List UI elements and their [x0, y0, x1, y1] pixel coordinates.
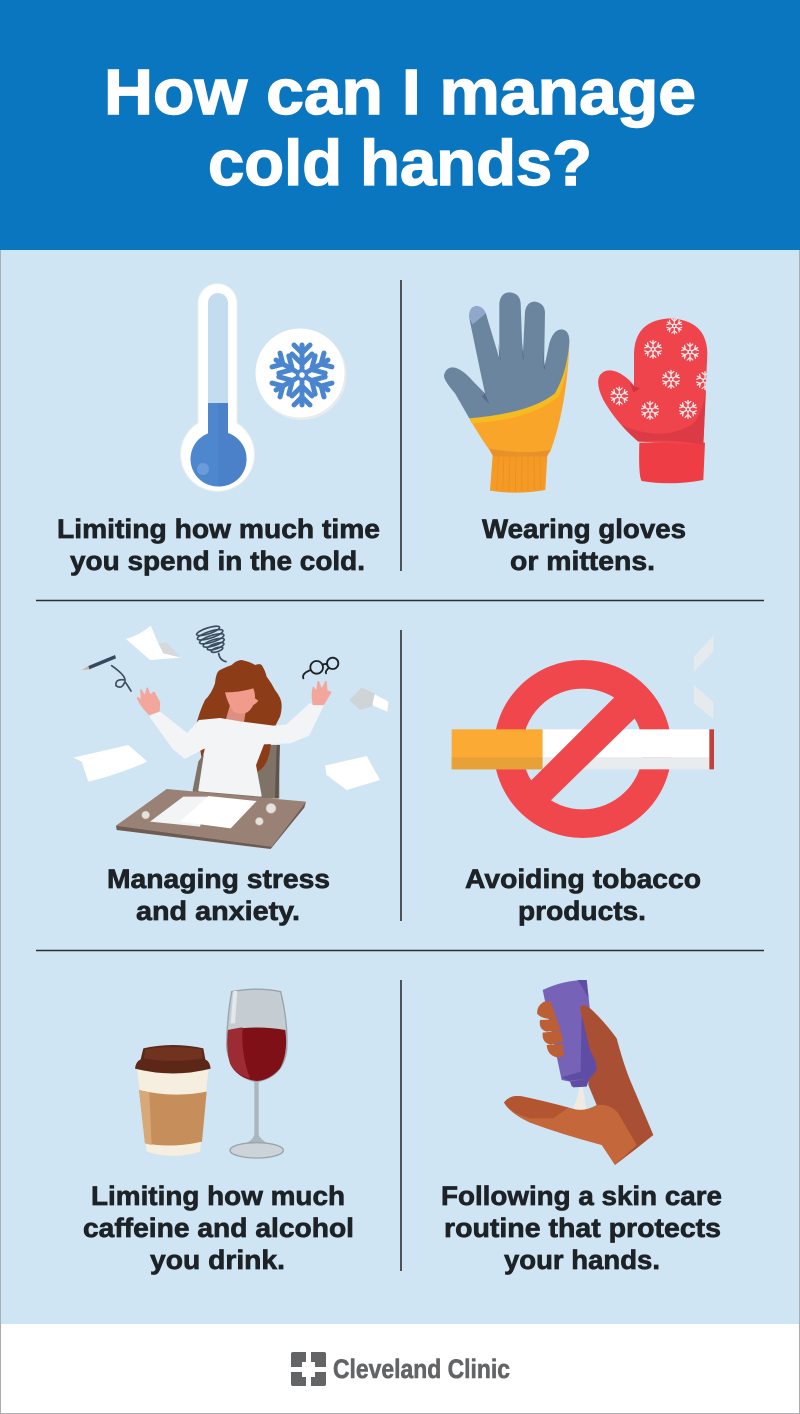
chair: [193, 745, 279, 798]
page background panel: [0, 250, 800, 1324]
caption: stress: [107, 864, 330, 926]
desk: [116, 789, 306, 847]
caption: skin care: routine that protects: [444, 1213, 721, 1243]
hair: [196, 660, 282, 773]
caption: limiting cold: Limiting how much time: [57, 514, 380, 544]
prohibition ring: [508, 674, 657, 824]
caption: caffeine and alcohol: caffeine and alcohol: [83, 1213, 354, 1243]
caption: caffeine and alcohol: you drink.: [150, 1245, 285, 1275]
caption: gloves: or mittens.: [510, 546, 655, 576]
caption: skin care: Following a skin care: [441, 1181, 722, 1211]
body and arms: [151, 704, 323, 796]
smoke: [694, 636, 713, 719]
caption: caffeine and alcohol: Limiting how much: [91, 1181, 345, 1211]
caption: skin care: your hands.: [504, 1245, 660, 1275]
back hand and arm: [588, 1007, 653, 1165]
caption: limiting cold: [57, 514, 380, 576]
hands: [138, 688, 159, 714]
caption: caffeine and alcohol: [83, 1181, 354, 1275]
divider lines: [36, 280, 764, 1271]
prohibition bar: [520, 686, 647, 811]
icon: coffee cup: [135, 1045, 211, 1156]
flying papers: [73, 626, 388, 790]
caption: tobacco: [465, 864, 701, 926]
caption: stress: and anxiety.: [136, 896, 300, 926]
caption: gloves: Wearing gloves: [482, 514, 686, 544]
lotion: [571, 1087, 587, 1111]
caption: tobacco: products.: [518, 896, 646, 926]
icon: snowflake badge: [256, 328, 346, 420]
icon: no smoking: [452, 636, 714, 824]
palm hand: [504, 1096, 637, 1165]
caption: stress: Managing stress: [107, 864, 330, 894]
header banner: [0, 0, 800, 250]
scribbles and glasses: [112, 624, 228, 691]
face: [225, 688, 258, 714]
neck: [225, 705, 247, 722]
caption: gloves: [482, 514, 686, 576]
title: How can I manage: [104, 56, 696, 128]
paper balls: [142, 803, 276, 825]
thumb: [580, 1005, 602, 1063]
icon: hand with lotion: [504, 980, 653, 1165]
icon: thermometer: [180, 284, 254, 491]
icon: glove: [444, 292, 569, 493]
fingers: [537, 1002, 564, 1057]
logo: Cleveland Clinic wordmark: Cleveland Clinic: [333, 1354, 510, 1384]
lotion tube: [543, 980, 597, 1087]
cigarette: [452, 729, 714, 769]
icon: mitten: [598, 318, 714, 483]
caption: limiting cold: you spend in the cold.: [70, 546, 365, 576]
caption: skin care: [441, 1181, 722, 1275]
footer: [0, 1324, 800, 1414]
icon: wine glass: [227, 989, 287, 1158]
ring segments over the filter edge: [520, 769, 543, 811]
title: cold hands?: [208, 127, 592, 199]
illustration: stressed woman at desk: [73, 624, 388, 849]
title: [104, 56, 696, 199]
desk papers: [150, 797, 208, 827]
pencil: [82, 655, 116, 670]
caption: tobacco: Avoiding tobacco: [465, 864, 701, 894]
logo: Cleveland Clinic mark: [291, 1352, 326, 1386]
